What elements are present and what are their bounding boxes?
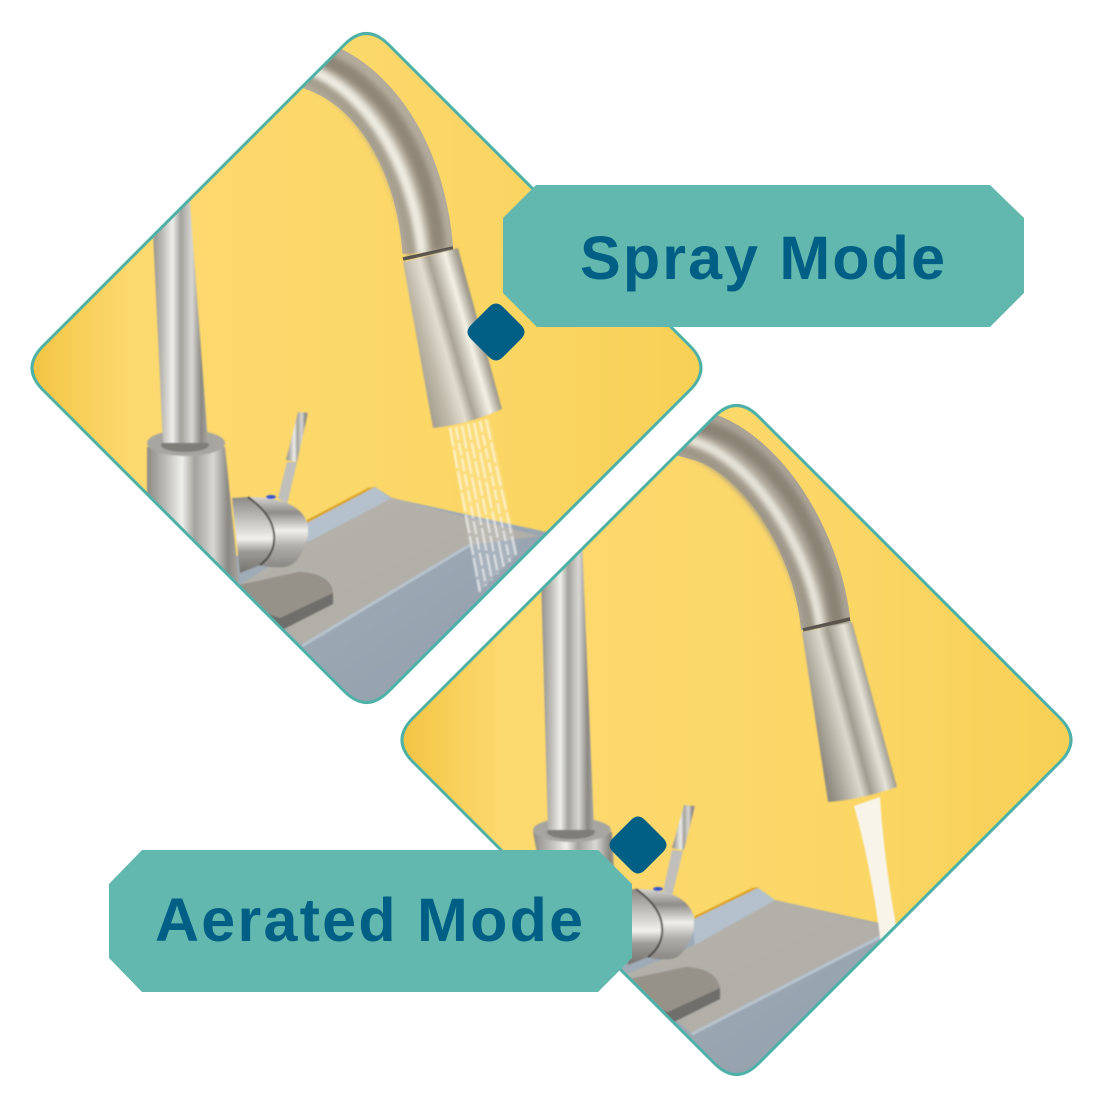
faucet riser pipe: [540, 540, 594, 830]
panel: aerated mode photo: [391, 394, 1082, 1100]
marker: aerated mode diamond: [610, 816, 666, 874]
curved spout: [662, 420, 837, 632]
label: spray mode: [503, 185, 1024, 327]
heading: spray mode: Spray Mode: [580, 224, 945, 292]
heading: aerated mode: Aerated Mode: [155, 886, 583, 954]
label: aerated mode: [109, 850, 632, 992]
faucet base plate: [632, 966, 721, 1022]
faucet riser pipe: [151, 190, 208, 443]
panel border: [402, 406, 1071, 1074]
faucet base cylinder: [146, 432, 239, 582]
curved spout: [288, 50, 439, 256]
spray head: [802, 619, 897, 802]
yellow wall background: [34, 35, 700, 556]
faucet base plate: [240, 572, 334, 630]
handle body: [622, 887, 694, 965]
handle body: [232, 495, 308, 573]
panel: spray mode photo: [21, 22, 712, 730]
yellow wall background: [404, 407, 1070, 925]
handle lever: [663, 805, 695, 896]
water spray: [448, 418, 518, 593]
handle lever: [278, 412, 308, 505]
spray head: [403, 248, 502, 428]
panel border: [32, 34, 701, 702]
marker: spray mode diamond: [468, 304, 524, 360]
sink basin: [236, 486, 546, 701]
faucet base cylinder: [532, 819, 615, 866]
sink basin: [622, 886, 881, 1073]
aerated water stream: [854, 797, 896, 945]
